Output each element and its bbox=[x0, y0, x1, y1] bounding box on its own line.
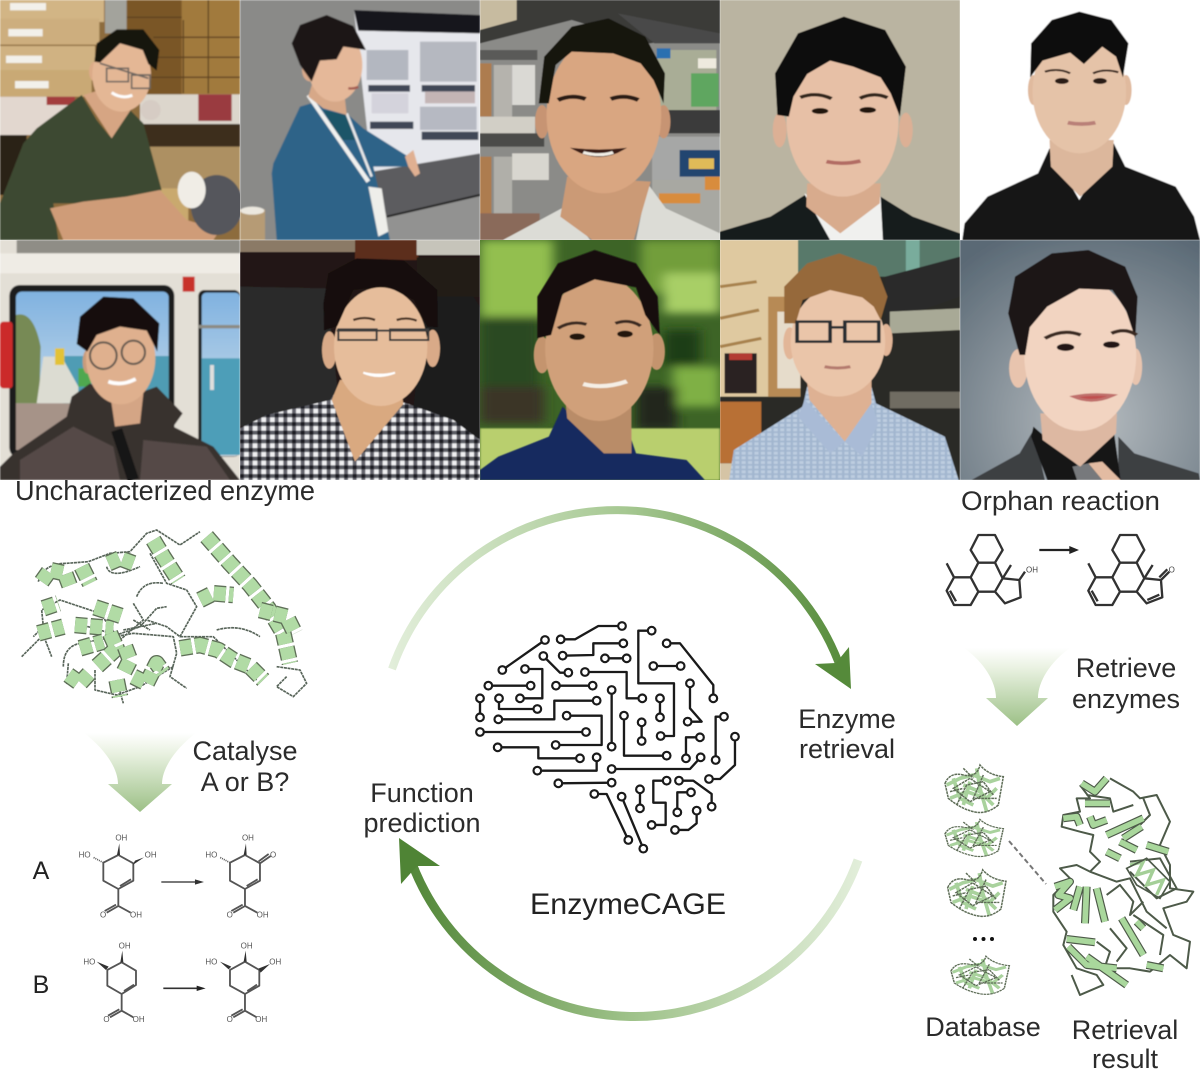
heading: orphan reaction: Orphan reaction bbox=[961, 486, 1160, 516]
arrow: gradient down, left bbox=[84, 733, 196, 812]
reaction B: HO bbox=[205, 958, 217, 967]
photo: researcher in black shirt, white background bbox=[962, 11, 1200, 240]
reaction A: OH bbox=[257, 910, 269, 919]
reaction A: OH bbox=[130, 910, 142, 919]
reaction A: HO bbox=[205, 850, 217, 859]
reaction B: OH bbox=[241, 941, 253, 950]
photo: researcher among cardboard boxes bbox=[0, 0, 240, 240]
photo: researcher with green foliage background bbox=[480, 240, 720, 480]
label: enzyme retrieval: Enzyme bbox=[798, 704, 896, 734]
reaction B: O bbox=[227, 1015, 233, 1024]
reaction B: OH bbox=[255, 1015, 268, 1024]
small protein 3 bbox=[948, 870, 1006, 916]
cycle arrow: enzyme retrieval bbox=[392, 510, 851, 689]
reaction A: OH bbox=[242, 834, 254, 843]
reaction B: OH bbox=[133, 1015, 145, 1024]
icon: circuit brain bbox=[476, 622, 739, 852]
label: EnzymeCAGE: EnzymeCAGE bbox=[530, 888, 726, 921]
reaction A: OH bbox=[115, 834, 128, 843]
reaction: orphan steroid: OH bbox=[1026, 566, 1038, 575]
reaction A: O bbox=[100, 910, 106, 919]
ellipsis bbox=[973, 937, 994, 941]
photo: researcher in checked shirt on black chair bbox=[240, 240, 480, 480]
label: option B: B bbox=[33, 971, 49, 999]
label: retrieval result bbox=[1072, 1015, 1178, 1070]
protein: uncharacterized enzyme ribbon bbox=[22, 530, 307, 703]
label: retrieval result: Retrieval bbox=[1072, 1015, 1178, 1045]
reaction: orphan steroid bbox=[947, 535, 1175, 605]
label: retrieve enzymes: Retrieve bbox=[1076, 653, 1176, 683]
arrow: gradient down, right bbox=[964, 648, 1070, 726]
cycle arrow: function prediction bbox=[399, 838, 858, 1017]
reaction B: O bbox=[103, 1015, 110, 1024]
label: enzyme retrieval bbox=[798, 704, 896, 764]
reaction A: HO bbox=[79, 850, 91, 859]
reaction A: O bbox=[227, 910, 233, 919]
small protein 2 bbox=[945, 819, 1003, 857]
heading: uncharacterized enzyme: Uncharacterized enzyme bbox=[15, 475, 315, 506]
reaction B bbox=[83, 941, 282, 1024]
reaction A bbox=[79, 834, 276, 919]
photo: researcher with glasses in lab interior bbox=[720, 240, 960, 480]
label: database: Database bbox=[925, 1012, 1041, 1042]
label: option A: A bbox=[33, 857, 50, 885]
photo: researcher in train cabin bbox=[0, 240, 240, 480]
small protein 1 bbox=[945, 765, 1003, 812]
reaction A: O bbox=[270, 850, 276, 859]
photo: researcher in suit, blue-grey studio bbox=[960, 240, 1200, 480]
dashed connector bbox=[1009, 841, 1046, 884]
photo: researcher in dark suit, beige background bbox=[720, 0, 960, 240]
label: catalyse A or B: Catalyse bbox=[192, 736, 298, 766]
label: catalyse A or B bbox=[192, 736, 298, 797]
reaction B: HO bbox=[83, 958, 95, 967]
photo: researcher presenting a poster bbox=[240, 0, 480, 240]
photo grid bbox=[0, 0, 1200, 480]
reaction A: OH bbox=[145, 850, 157, 859]
protein: retrieval result bbox=[1053, 778, 1193, 995]
label: function prediction bbox=[363, 778, 481, 838]
label: function prediction: prediction bbox=[363, 808, 481, 838]
reaction B: OH bbox=[119, 941, 131, 950]
small protein 4 bbox=[951, 956, 1009, 994]
label: function prediction: Function bbox=[370, 778, 474, 808]
database of small proteins bbox=[945, 765, 1009, 994]
label: retrieve enzymes: enzymes bbox=[1072, 684, 1180, 714]
label: retrieve enzymes bbox=[1072, 653, 1180, 714]
reaction: orphan steroid: O bbox=[1169, 566, 1175, 575]
label: enzyme retrieval: retrieval bbox=[799, 734, 895, 764]
photo: researcher in a laboratory bbox=[480, 0, 720, 240]
label: catalyse A or B: A or B? bbox=[201, 767, 289, 797]
reaction B: OH bbox=[269, 958, 282, 967]
